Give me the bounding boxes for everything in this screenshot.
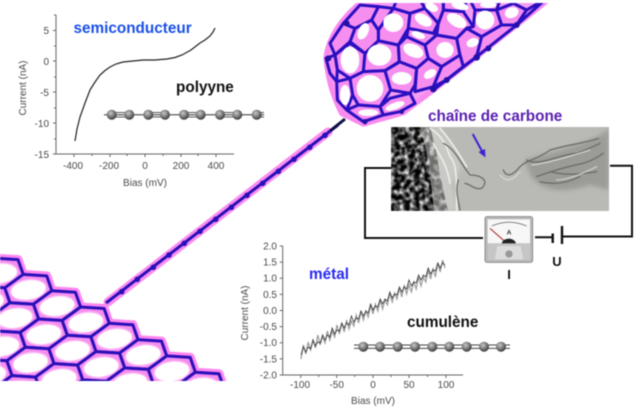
curve: [75, 28, 215, 141]
x tick labels: 100: [438, 380, 455, 391]
y tick labels: [260, 242, 277, 382]
y tick labels: -10: [35, 119, 49, 130]
label: I: I: [507, 267, 511, 282]
x tick labels: 0: [370, 380, 376, 391]
y tick labels: -2.0: [260, 370, 277, 382]
arrow: points to carbon chain: [473, 134, 486, 158]
carbon chain between electrodes: [106, 119, 345, 303]
x tick labels: 400: [208, 161, 225, 172]
carbon nanotube: top electrode: [325, 0, 550, 124]
x axis title: Bias (mV): [351, 396, 395, 407]
microscope image of carbon chain: [391, 127, 609, 211]
chart: semiconductor I-V curve: [18, 15, 234, 189]
y axis title: Current (nA): [18, 60, 29, 116]
x tick labels: -200: [99, 161, 119, 172]
y axis title: Current (nA): [240, 285, 251, 341]
icon: ammeter: A: [507, 230, 512, 237]
x tick labels: -400: [63, 161, 83, 172]
label: métal: métal: [309, 266, 349, 283]
x tick labels: -50: [329, 380, 344, 391]
label: U: U: [552, 254, 562, 269]
y tick labels: -15: [35, 150, 49, 161]
y tick labels: 2.0: [263, 242, 277, 252]
noisy curve: dark trace: [301, 263, 445, 355]
x tick labels: [63, 161, 225, 172]
circuit wires: [365, 166, 632, 238]
molecule: polyyne: [104, 110, 264, 120]
label: chaîne de carbone: chaîne de carbone: [428, 108, 562, 125]
x tick labels: [290, 380, 455, 391]
y tick labels: -0.5: [260, 322, 277, 333]
axes: [53, 15, 234, 157]
chart: metallic I-V curve: [240, 242, 463, 407]
x axis title: Bias (mV): [123, 178, 167, 189]
x tick labels: -100: [290, 380, 310, 391]
label: cumulène: cumulène: [407, 314, 478, 331]
y tick labels: -1.0: [260, 338, 277, 349]
x tick labels: 50: [403, 380, 415, 391]
y tick labels: 0.0: [263, 306, 277, 317]
axes: [280, 246, 463, 378]
molecule: cumulene: [354, 342, 510, 352]
y tick labels: 0.5: [263, 290, 277, 301]
icon: battery symbol: [553, 226, 562, 244]
y tick labels: -1.5: [260, 354, 277, 365]
graphene sheet: bottom-left electrode: [0, 253, 227, 382]
label: polyyne: polyyne: [176, 79, 234, 96]
x tick labels: 200: [173, 161, 190, 172]
icon: ammeter: [485, 217, 533, 262]
x tick labels: 0: [142, 161, 148, 172]
label: semiconducteur: semiconducteur: [74, 20, 192, 37]
y tick labels: 1.0: [263, 274, 277, 285]
noisy curve: light trace: [301, 260, 445, 359]
y tick labels: -5: [40, 88, 49, 99]
y tick labels: 0: [43, 57, 49, 68]
y tick labels: 1.5: [263, 258, 277, 269]
y tick labels: [35, 26, 49, 161]
y tick labels: 5: [43, 26, 49, 37]
